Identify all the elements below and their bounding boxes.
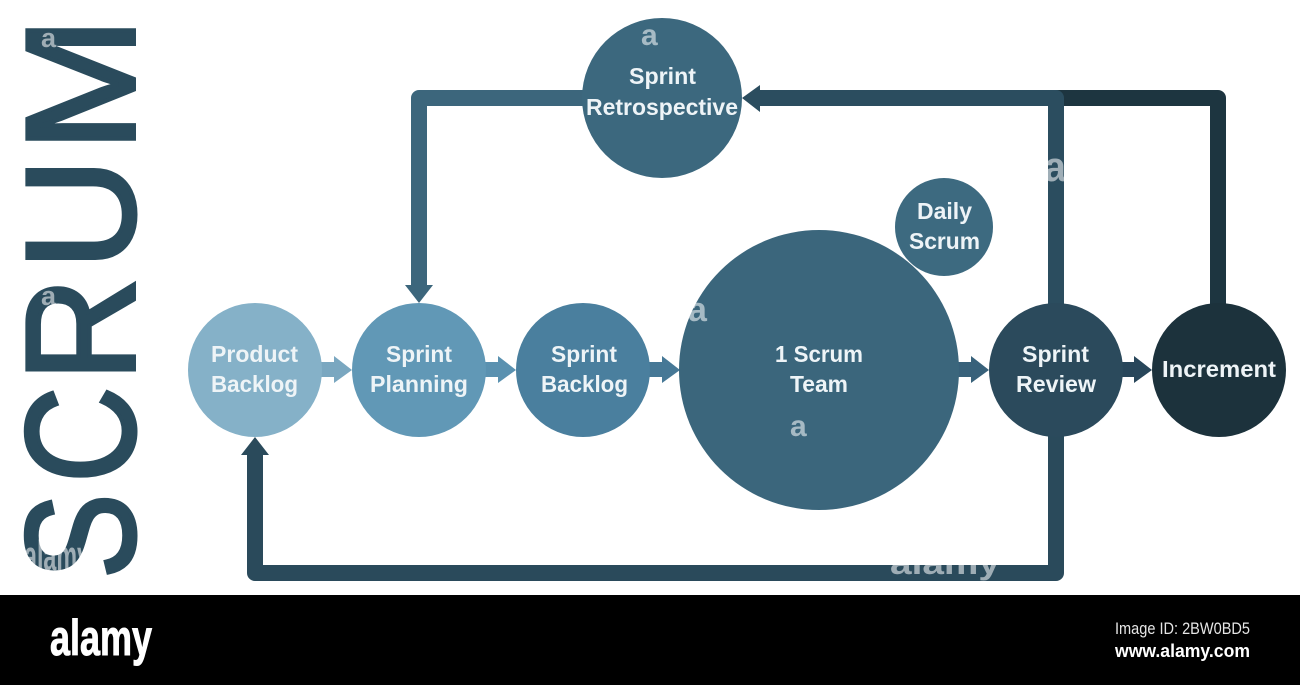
node: Daily Scrum: Scrum [909,228,980,254]
watermark fragments: a [641,19,658,52]
node: Sprint Retrospective: Sprint [629,63,696,89]
node: Product Backlog: Product [211,341,298,367]
connector: review to retrospective [742,85,1056,304]
node: Sprint Retrospective [582,18,742,178]
node: Increment: Increment [1162,356,1276,382]
arrow: sprint backlog to team [646,356,680,383]
node: Sprint Review: Sprint [1022,341,1089,367]
connector: increment to retrospective [1056,98,1218,304]
connector: retrospective to planning [405,98,590,303]
node: 1 Scrum Team: Team [790,371,848,397]
node: 1 Scrum Team [679,230,959,510]
node: Increment [1152,303,1286,437]
watermark fragments: a [790,410,807,443]
watermark fragments: a [1044,143,1067,190]
node: Sprint Planning: Planning [370,371,468,397]
node: Sprint Retrospective: Retrospective [586,94,738,120]
node: Product Backlog: Backlog [211,371,298,397]
watermark fragments [24,19,1067,581]
node: Sprint Planning: Sprint [386,341,452,367]
node: Daily Scrum [895,178,993,276]
node: Daily Scrum: Daily [917,198,972,224]
watermark fragments: alamy [890,545,1000,581]
arrow: backlog to planning [318,356,352,383]
node: Sprint Review [989,303,1123,437]
footer text: image id: Image ID: 2BW0BD5 [1115,619,1250,638]
connector: review to product backlog [241,436,1056,573]
arrow: planning to sprint backlog [482,356,516,383]
node: Product Backlog [188,303,322,437]
title: SCRUM vertical [0,17,167,579]
node: Sprint Backlog: Backlog [541,371,628,397]
arrow: team to review [956,356,989,383]
footer logo: alamy: alamy [50,610,152,666]
node: Sprint Backlog: Sprint [551,341,617,367]
footer bar [0,595,1300,685]
node: 1 Scrum Team: 1 Scrum [775,341,863,367]
node: Sprint Review: Review [1016,371,1096,397]
node: Sprint Backlog [516,303,650,437]
watermark fragments: alamy [24,532,90,579]
node: Sprint Planning [352,303,486,437]
arrow: review to increment [1119,356,1152,383]
watermark fragments: a [41,23,57,53]
watermark fragments: a [41,281,57,311]
footer text: url: www.alamy.com [1114,641,1250,661]
watermark fragments: a [688,291,708,329]
